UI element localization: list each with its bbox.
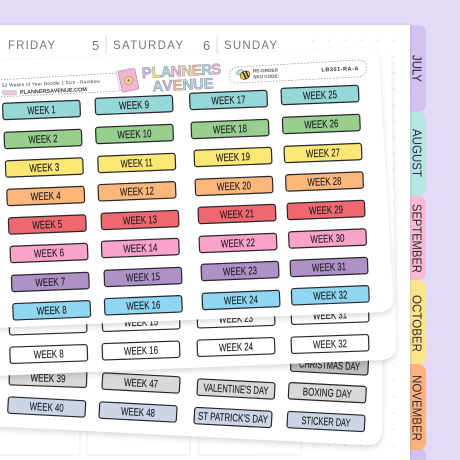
planner day boxes: [0, 430, 301, 455]
sticker: Week 17: [190, 90, 267, 110]
sticker: Week 8 white: WEEK 8: [34, 348, 64, 361]
sticker: Week 47: WEEK 47: [124, 377, 158, 391]
sticker: Week 2: [4, 129, 82, 149]
sticker: Week 21: [198, 204, 276, 224]
sticker: Boxing Day: BOXING DAY: [302, 386, 353, 401]
sticker: Week 25: [281, 85, 359, 105]
sticker: Week 27: WEEK 27: [306, 147, 340, 160]
rainbow swatch icon: [2, 90, 16, 95]
sticker: Boxing Day: [288, 382, 366, 403]
logo line: Planners: N: [170, 63, 182, 81]
sticker: Week 1: WEEK 1: [27, 104, 56, 117]
sticker: Sticker Day: [287, 411, 365, 432]
logo line: Planners: P: [141, 65, 152, 82]
SKU code: LB301-RA-A: [321, 66, 359, 73]
sticker: Christmas Day: CHRISTMAS DAY: [299, 358, 361, 373]
sticker: Week 4: [7, 186, 85, 206]
sticker: Week 47: [102, 373, 180, 393]
sticker: Week 23 white: [197, 309, 275, 328]
day: Sunday: SUNDAY: [224, 40, 277, 52]
tab: August: [410, 112, 426, 196]
reorder strip: [229, 60, 366, 83]
sticker: Week 32 white: WEEK 32: [313, 338, 347, 351]
sticker: Week 5: WEEK 5: [32, 219, 63, 232]
logo line: Avenue: N: [182, 76, 194, 94]
sticker: Week 7: [11, 272, 89, 292]
logo line: Avenue: A: [152, 78, 164, 96]
sticker: Week 10: WEEK 10: [117, 128, 152, 141]
sticker: Week 15 white: WEEK 15: [124, 316, 158, 329]
date: 5: 5: [92, 38, 99, 53]
product name: 52 Weeks of Year Doodle 1.0cm - Rainbow: [2, 79, 101, 88]
sticker: Week 14: [101, 238, 179, 258]
sticker: Week 15 white: [102, 312, 180, 332]
sticker sheet: third: [0, 52, 387, 445]
sticker: Week 30: WEEK 30: [310, 233, 345, 246]
sticker: hidden row white left: [9, 316, 87, 335]
sticker: Week 15: [104, 267, 182, 287]
planner header row: [8, 36, 277, 54]
sticker sheet: second: [0, 50, 396, 376]
sticker: Week 29: WEEK 29: [309, 204, 343, 217]
sticker: Week 29: [287, 200, 365, 220]
sticker: Christmas Day: [290, 355, 369, 375]
sticker: Week 3: WEEK 3: [29, 162, 60, 175]
sticker: Week 28: [286, 172, 363, 191]
sticker: Week 11: WEEK 11: [121, 157, 153, 170]
sticker: Week 10: [96, 124, 173, 144]
sticker: Week 20: WEEK 20: [217, 180, 251, 193]
sticker: Week 24 white: [197, 337, 275, 357]
sticker: Week 24: [202, 290, 280, 310]
sticker: Week 9: [95, 95, 173, 115]
logo line: Planners: R: [201, 61, 213, 79]
logo line: Planners: E: [191, 62, 202, 79]
date: 6: 6: [203, 38, 210, 53]
sticker: Week 19: [194, 147, 272, 167]
sticker: Week 32: WEEK 32: [313, 289, 348, 303]
sticker: Week 3: [5, 158, 83, 177]
logo line: Planners: S: [211, 61, 222, 78]
sticker: Week 48: WEEK 48: [121, 406, 155, 420]
sticker: Week 1: [3, 100, 80, 120]
sticker: St Patrick's Day: [194, 407, 272, 428]
logo line: Planners: L: [151, 64, 161, 82]
sheet 1 paper: [0, 48, 393, 328]
sticker: Week 12: WEEK 12: [120, 185, 154, 199]
logo line: Avenue: E: [203, 75, 214, 93]
tab: November: NOVEMBER: [410, 375, 424, 441]
sticker: Week 27: [284, 143, 362, 163]
logo line: Planners: A: [160, 64, 172, 81]
reorder text: RE-ORDER: [253, 68, 279, 73]
product info strip: [0, 73, 120, 97]
sticker: Week 19: WEEK 19: [216, 151, 250, 164]
sticker: Week 20: [195, 176, 273, 196]
sticker: Week 6: WEEK 6: [34, 247, 64, 260]
sticker: Week 18: WEEK 18: [213, 123, 247, 136]
sticker: Week 48: [99, 402, 177, 422]
icon: notebook: [116, 67, 139, 93]
sticker: Week 28: WEEK 28: [307, 176, 342, 189]
tab: August: AUGUST: [410, 129, 424, 177]
sticker: Week 40: [8, 397, 86, 417]
sticker: Week 26: [282, 114, 360, 134]
sticker: Valentine's Day: [197, 379, 275, 399]
sticker: Week 39: [9, 368, 87, 388]
sticker: Week 13: [101, 210, 179, 230]
sheet header: [0, 60, 366, 97]
logo line: Avenue: V: [162, 78, 173, 95]
sticker: Week 25: WEEK 25: [303, 89, 337, 102]
sticker: Week 22: WEEK 22: [221, 237, 255, 250]
tab: October: OCTOBER: [410, 295, 424, 352]
sticker: Week 4: WEEK 4: [31, 190, 61, 203]
sticker: St Patrick's Day: ST PATRICK'S DAY: [198, 410, 269, 426]
sticker: Week 16: [104, 296, 182, 315]
sticker: Week 24: WEEK 24: [224, 294, 258, 307]
day: Friday: FRIDAY: [8, 40, 55, 52]
divider tabs: [410, 25, 426, 460]
tab: July: [410, 25, 426, 112]
tab: October: [410, 280, 426, 364]
sticker: Week 31: WEEK 31: [312, 261, 346, 274]
logo line: Avenue: E: [172, 77, 183, 94]
sticker: Week 16: WEEK 16: [126, 299, 161, 313]
sheet 3 paper: [0, 52, 387, 445]
sticker: Week 2: WEEK 2: [28, 133, 58, 146]
sticker: Week 16 white: WEEK 16: [124, 345, 158, 358]
sticker: Week 15: WEEK 15: [126, 271, 160, 284]
sticker: Week 17: WEEK 17: [211, 94, 246, 107]
sticker: Week 5: [8, 215, 86, 234]
sticker: Week 23: [201, 261, 279, 281]
sticker: Week 8: [13, 301, 91, 320]
sticker: Sticker Day: STICKER DAY: [301, 415, 351, 430]
sticker: Week 26: WEEK 26: [304, 118, 339, 131]
icon: bee: [236, 67, 251, 82]
sticker: Week 40: WEEK 40: [29, 401, 64, 415]
sticker: Week 18: [191, 119, 269, 139]
sticker: Week 16 white: [102, 341, 180, 360]
sticker: Week 31: [290, 257, 368, 277]
sticker: Week 22: [199, 233, 277, 253]
sticker: Week 32: [291, 286, 369, 305]
sticker: Week 21: WEEK 21: [220, 208, 254, 221]
sticker: Week 23 white: WEEK 23: [219, 313, 253, 326]
sticker: Week 30: [289, 229, 366, 248]
sticker: Week 39: WEEK 39: [30, 372, 66, 385]
logo: Planners Avenue: [141, 61, 222, 96]
day: Saturday: SATURDAY: [113, 40, 183, 52]
tab: July: JULY: [410, 55, 424, 83]
sticker: Week 11: [98, 153, 176, 173]
sticker: Valentine's Day: VALENTINE'S DAY: [203, 382, 269, 398]
sticker: Week 8: WEEK 8: [37, 305, 67, 318]
sticker: Week 31 white: [291, 305, 369, 325]
dot grid: [300, 32, 410, 460]
sticker: Week 6: [10, 243, 88, 263]
sticker: Week 31 white: WEEK 31: [313, 309, 347, 322]
tab: September: SEPTEMBER: [410, 204, 424, 273]
sticker: Week 14: WEEK 14: [123, 242, 158, 255]
logo line: Avenue: U: [193, 76, 204, 93]
website: PLANNERSAVENUE.COM: [20, 87, 87, 96]
sticker: Week 24 white: WEEK 24: [219, 341, 253, 354]
sticker: Week 23: WEEK 23: [223, 265, 257, 278]
sticker sheet: top rainbow: [0, 48, 393, 328]
logo line: Planners: N: [181, 62, 193, 80]
sticker: Week 8 white: [10, 344, 88, 364]
sticker: Week 12: [98, 182, 176, 201]
sticker: Week 9: WEEK 9: [119, 99, 149, 112]
tab: December: [410, 449, 426, 460]
reorder text: SKU CODE:: [253, 74, 280, 79]
sticker: Week 32 white: [291, 334, 369, 354]
sticker: Week 7: WEEK 7: [35, 276, 66, 289]
sticker: Week 13: WEEK 13: [123, 214, 157, 227]
sheet 2 paper: [0, 50, 396, 376]
